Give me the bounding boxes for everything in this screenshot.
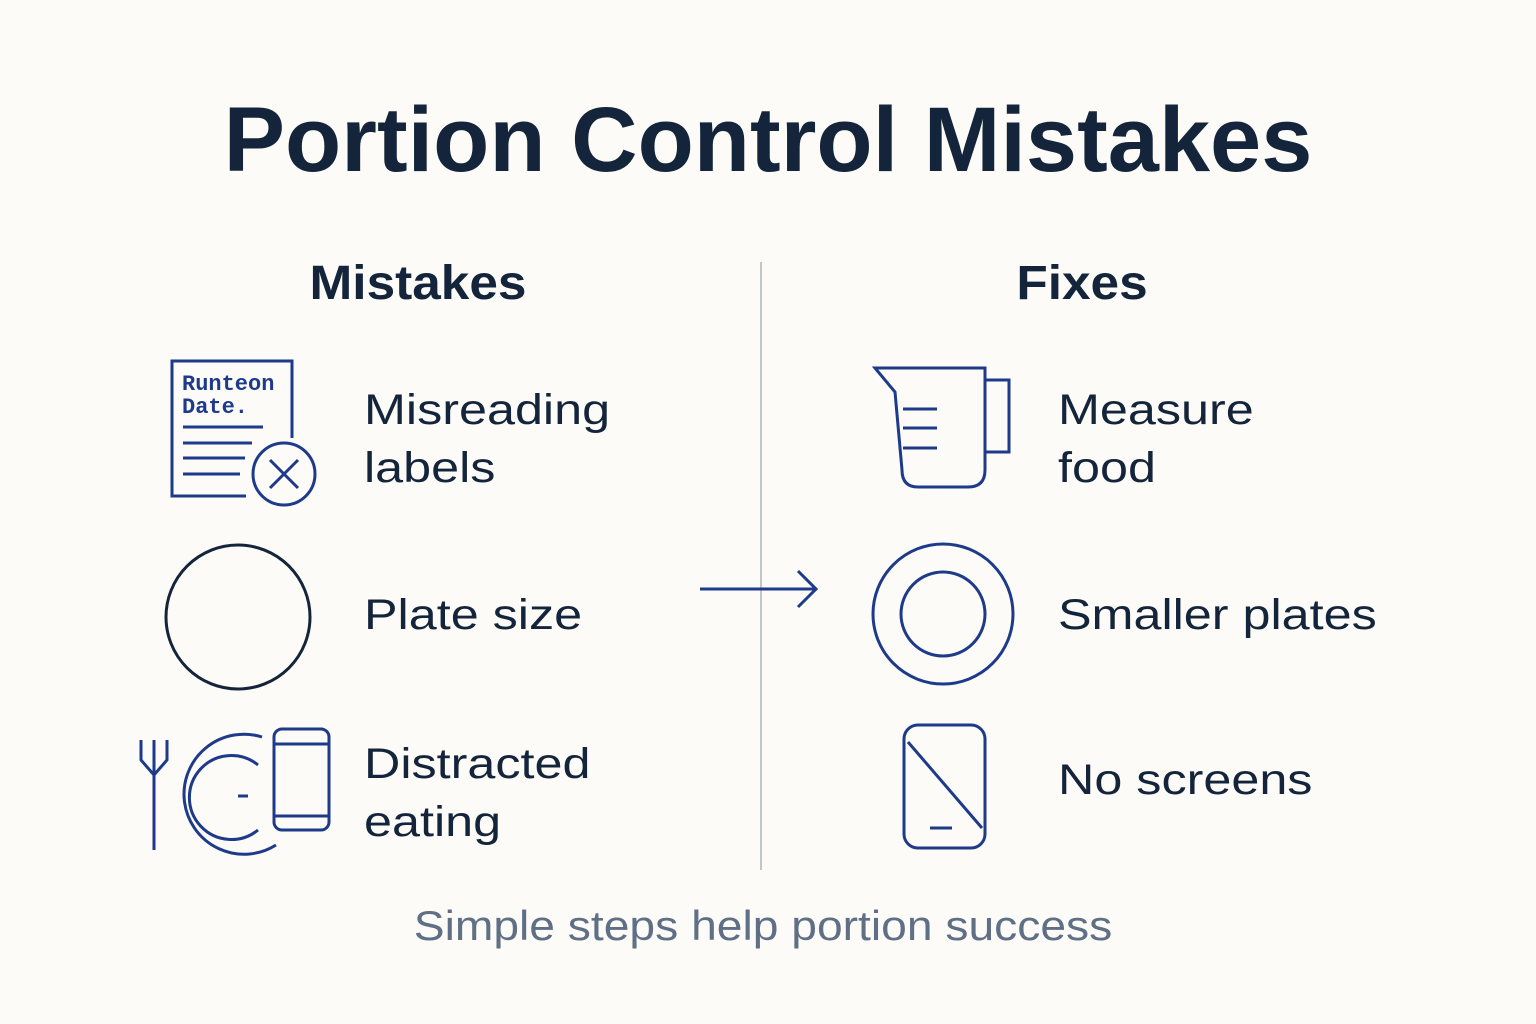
text: misreading labels <box>364 386 610 492</box>
text: smaller plates: Smaller plates <box>1058 591 1377 639</box>
icon: label with x: Date. <box>182 395 248 420</box>
text: misreading labels: labels <box>364 444 495 492</box>
icon: label with x <box>170 360 316 506</box>
icon: distracted eating <box>140 728 330 856</box>
arrow <box>700 570 818 608</box>
heading: mistakes: Mistakes <box>310 257 526 310</box>
text: measure food: Measure <box>1058 386 1254 434</box>
icon: smaller plate <box>872 542 1014 686</box>
text: measure food <box>1058 386 1254 492</box>
text: plate size: Plate size <box>364 591 582 639</box>
footer tagline: Simple steps help portion success <box>414 902 1112 949</box>
text: distracted eating: Distracted <box>364 740 590 788</box>
title: Portion Control Mistakes <box>224 89 1312 191</box>
text: distracted eating: eating <box>364 798 501 846</box>
icon: no phone <box>902 724 986 850</box>
text: measure food: food <box>1058 444 1156 492</box>
text: misreading labels: Misreading <box>364 386 610 434</box>
icon: label with x: Runteon <box>182 372 274 397</box>
divider line <box>760 262 762 870</box>
text: distracted eating <box>364 740 590 846</box>
heading: fixes: Fixes <box>1016 257 1148 310</box>
icon: plate <box>164 544 312 690</box>
text: no screens: No screens <box>1058 756 1312 804</box>
icon: measuring cup <box>872 366 1010 488</box>
